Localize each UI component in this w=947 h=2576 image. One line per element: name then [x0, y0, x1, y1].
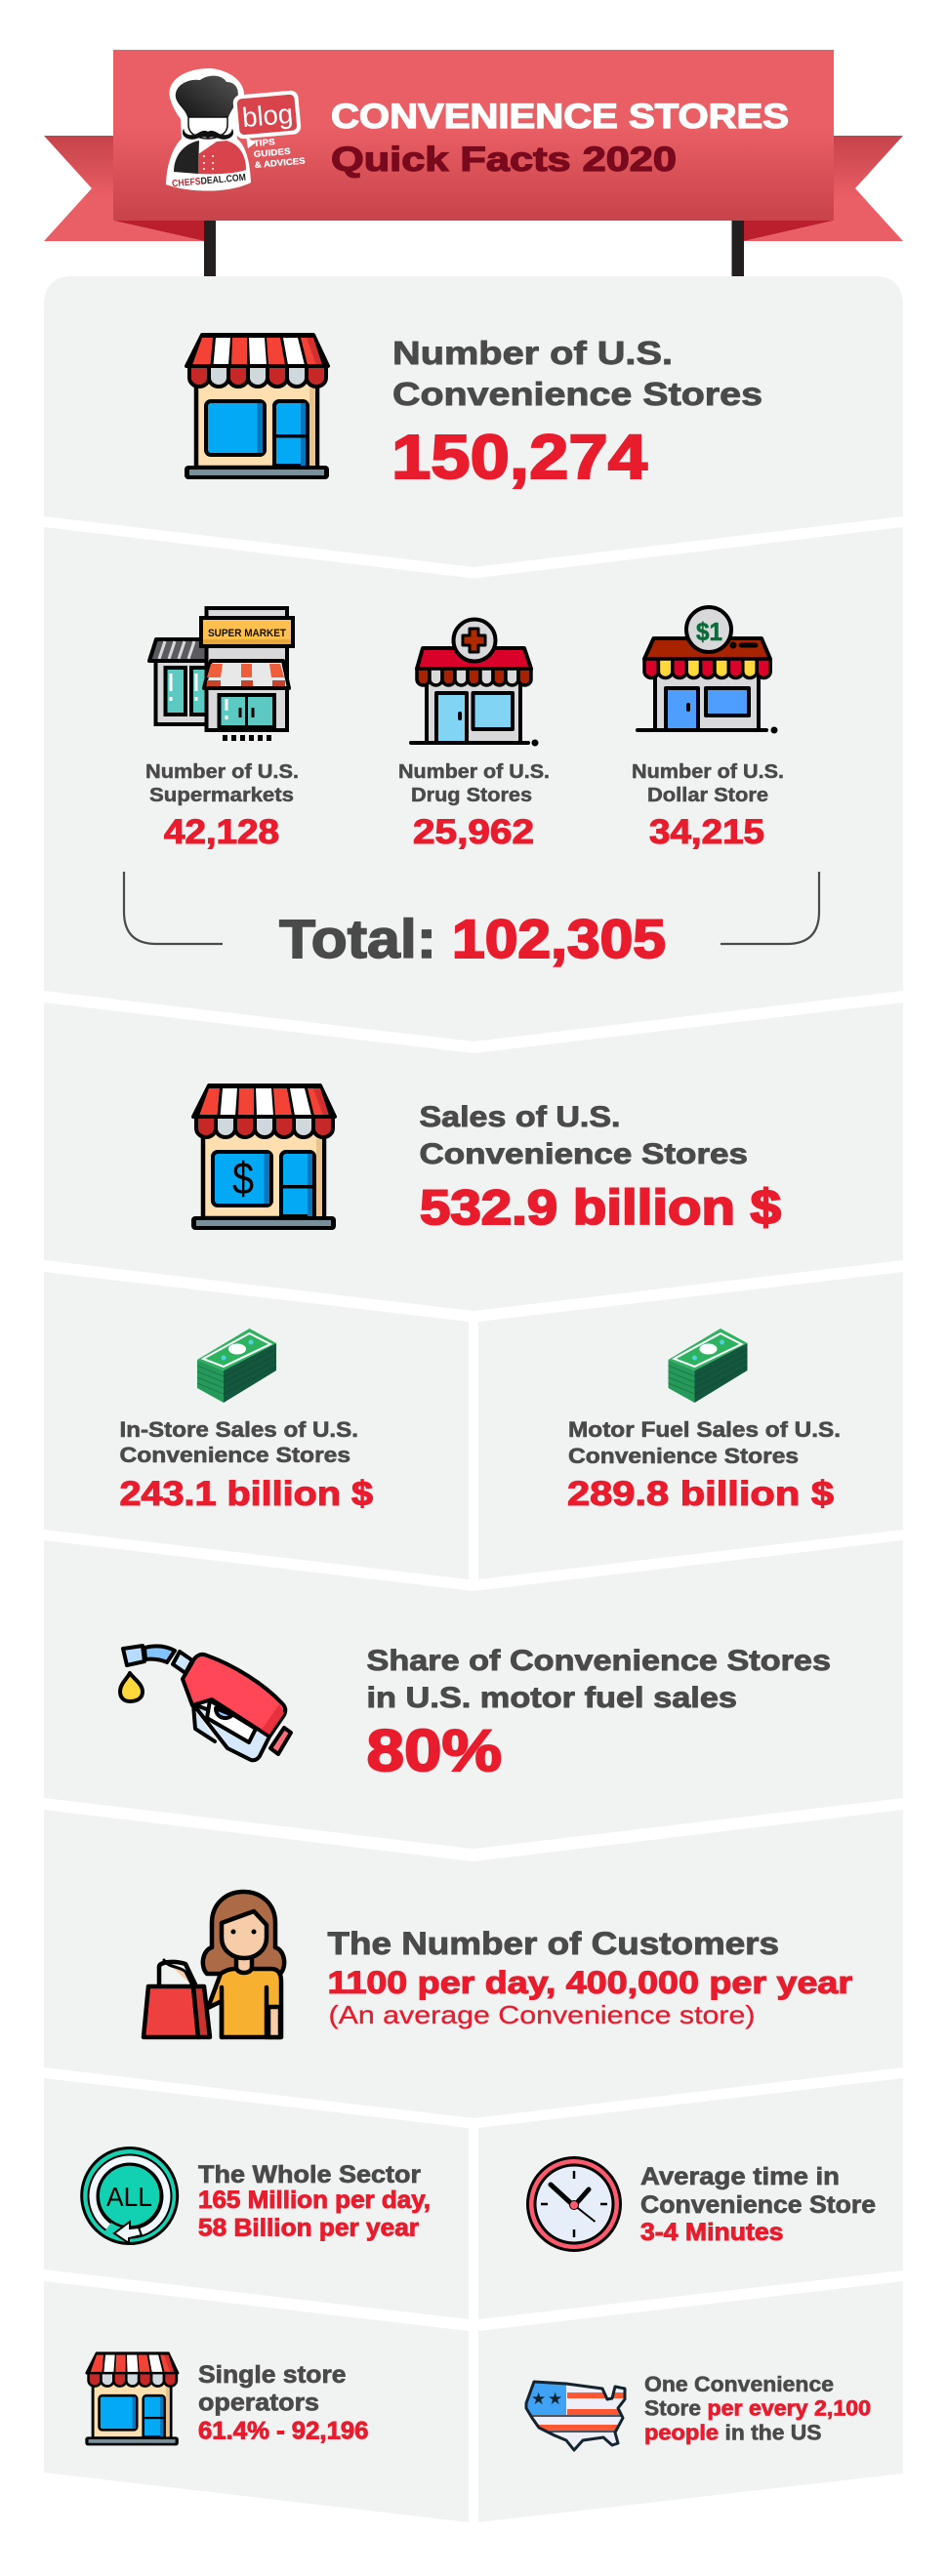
heading [392, 335, 762, 412]
text: 165 Million per day, [198, 2187, 431, 2214]
bracket [124, 872, 819, 944]
label: drug stores: 25,962 [413, 813, 534, 851]
label: dollar stores: Number of U.S. [632, 761, 784, 783]
text: people [644, 2421, 719, 2444]
value: 532.9 billion $ [420, 1180, 781, 1235]
icon: US flag map: ★ [548, 2390, 562, 2409]
text: Convenience Store [640, 2191, 876, 2219]
icon: fuel nozzle [120, 1646, 291, 1760]
heading [367, 1645, 831, 1714]
text: 1100 per day, 400,000 per year [328, 1965, 852, 2000]
value: 150,274 [391, 422, 647, 492]
panel: number of stores [44, 276, 903, 567]
heading: Convenience Stores [392, 376, 762, 412]
logo: chefsdeal blog: GUIDES [253, 146, 291, 159]
text: One Convenience [644, 2372, 834, 2396]
logo: chefsdeal blog: CHEFSDEAL.COM [172, 173, 246, 189]
text: Convenience Stores [119, 1443, 350, 1467]
panel: in-store sales [44, 1272, 469, 1579]
text: 3-4 Minutes [640, 2219, 783, 2246]
text: 61.4% - 92,196 [198, 2417, 369, 2444]
heading: Number of U.S. [392, 335, 673, 371]
banner body [113, 50, 834, 221]
logo: chefsdeal blog: blog [241, 99, 294, 133]
text: Single store [198, 2361, 347, 2389]
icon: supermarket [149, 608, 293, 741]
label: drug stores [398, 761, 550, 851]
text: In-Store Sales of U.S. [119, 1417, 358, 1442]
ribbon folds [113, 221, 834, 241]
panel: customers [44, 1810, 903, 2118]
value: 80% [367, 1718, 502, 1783]
text [119, 1417, 373, 1513]
panel: motor fuel sales [478, 1272, 903, 1579]
text: 289.8 billion $ [567, 1475, 834, 1513]
text: Store [644, 2395, 701, 2421]
icon: store with dollar sign [191, 1085, 336, 1230]
label: drug stores: Number of U.S. [398, 761, 550, 783]
logo: chefsdeal blog: TIPS [253, 137, 275, 148]
panel: average time [478, 2078, 903, 2319]
text: (An average Convenience store) [328, 2000, 756, 2029]
banner [44, 50, 903, 277]
icon: shopper [144, 1892, 284, 2037]
icon: small store [85, 2353, 179, 2445]
panel: single store operators [44, 2281, 469, 2522]
heading: Convenience Stores [420, 1138, 748, 1170]
text: The Number of Customers [328, 1926, 779, 1961]
label: dollar stores [632, 761, 784, 851]
panel: sales [44, 1002, 903, 1311]
label: dollar stores: Dollar Store [647, 785, 768, 806]
icon: cash stack [668, 1329, 748, 1403]
logo: chefsdeal blog [166, 68, 306, 191]
text [644, 2372, 871, 2444]
right ribbon tail [834, 136, 903, 241]
icon: supermarket: SUPER MARKET [208, 628, 286, 639]
text: The Whole Sector [198, 2161, 421, 2188]
icon: dollar store [638, 607, 775, 732]
heading: Share of Convenience Stores [367, 1645, 831, 1677]
heading: in U.S. motor fuel sales [367, 1682, 737, 1714]
heading: Sales of U.S. [420, 1101, 621, 1133]
text [198, 2161, 431, 2241]
icon: US flag map: ★ [531, 2390, 546, 2409]
text [328, 1926, 852, 2029]
text [567, 1417, 841, 1513]
icon: cash stack [197, 1329, 276, 1403]
text: operators [198, 2390, 319, 2417]
label: supermarkets: Supermarkets [149, 785, 294, 806]
label: supermarkets: 42,128 [164, 813, 279, 851]
logo: chefsdeal blog: & ADVICES [254, 155, 306, 170]
text: per every 2,100 [707, 2395, 871, 2421]
label: supermarkets: Number of U.S. [145, 761, 299, 783]
total [279, 908, 666, 969]
text: Motor Fuel Sales of U.S. [568, 1417, 841, 1442]
title: CONVENIENCE STORES [331, 98, 789, 136]
banner posts [204, 221, 744, 277]
icon: all arrow [82, 2147, 178, 2243]
heading [420, 1101, 748, 1170]
icon: clock [526, 2156, 622, 2252]
icon: dollar store: $1 [696, 617, 722, 646]
panel: people per store [478, 2281, 903, 2522]
panel: whole sector [44, 2078, 469, 2319]
text: 58 Billion per year [198, 2214, 419, 2241]
icon: store [185, 335, 329, 479]
text: Average time in [640, 2163, 840, 2190]
subtitle: Quick Facts 2020 [331, 141, 677, 179]
text: in the US [724, 2421, 822, 2444]
text: 243.1 billion $ [119, 1475, 373, 1513]
panel: competitors [44, 527, 903, 1042]
text [198, 2361, 369, 2444]
label: supermarkets [145, 761, 299, 851]
text [640, 2163, 876, 2246]
icon: drug store [411, 619, 537, 744]
icon: store with dollar sign: $ [232, 1153, 254, 1204]
icon: all arrow: ALL [106, 2182, 152, 2212]
total: 102,305 [452, 908, 666, 969]
left ribbon tail [44, 136, 113, 241]
label: dollar stores: 34,215 [649, 813, 764, 851]
label: drug stores: Drug Stores [411, 785, 532, 806]
panel: fuel share [44, 1540, 903, 1849]
total: Total: [279, 908, 436, 969]
icon: US flag map [525, 2378, 628, 2451]
text: Convenience Stores [568, 1444, 799, 1468]
